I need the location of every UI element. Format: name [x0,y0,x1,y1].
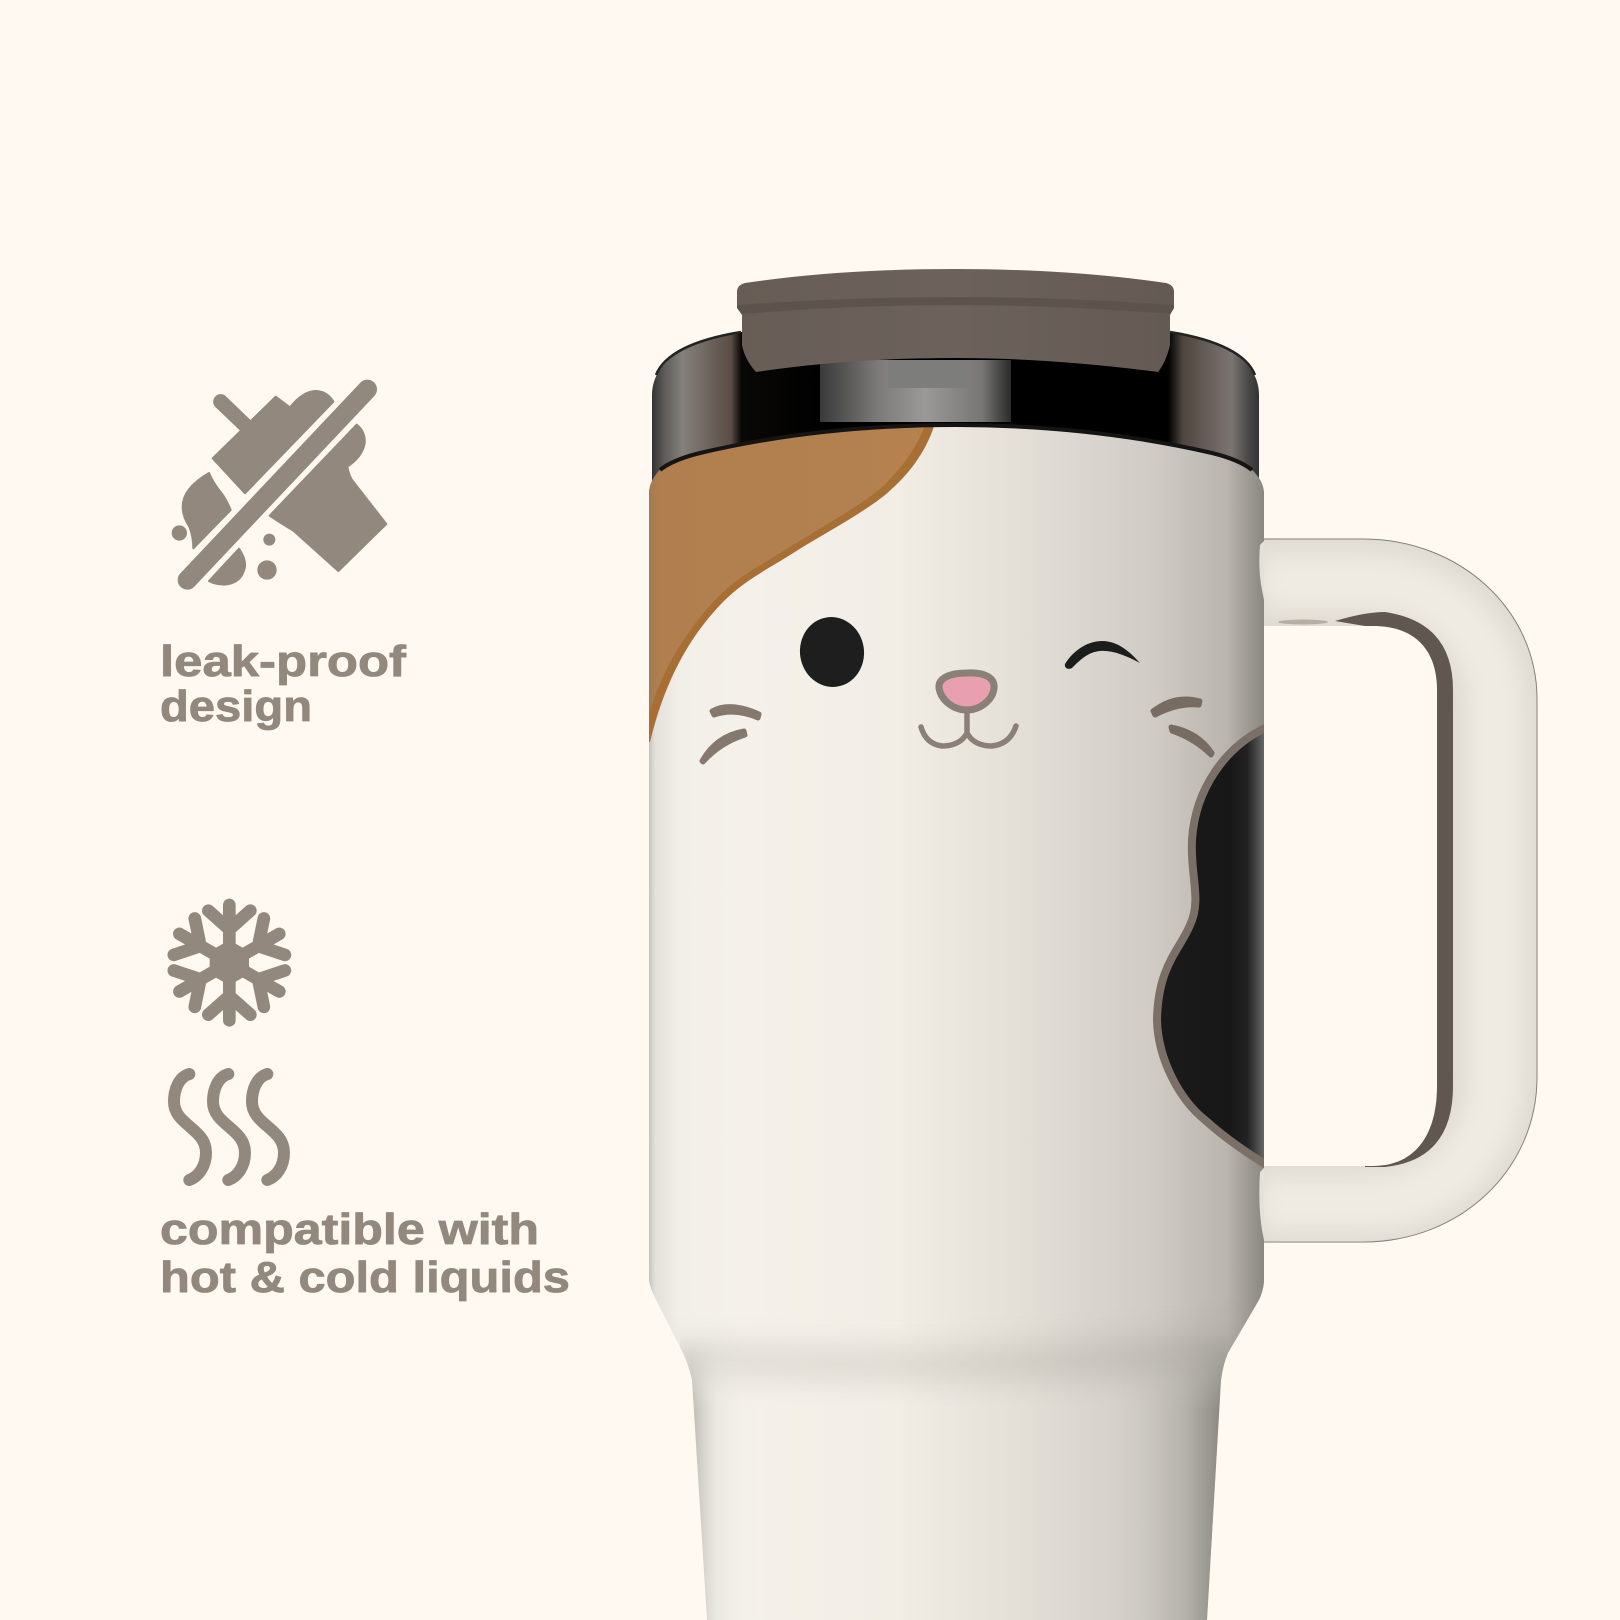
tumbler glass collar [652,332,1259,482]
body top rim [660,425,1252,470]
text: compatible with hot and cold liquids [160,1205,570,1302]
mouth [921,714,1016,746]
handle inner shadow band [1335,612,1453,1167]
right whiskers [1153,699,1212,755]
waist shading [680,1330,1240,1378]
nose [939,673,994,710]
tumbler handle [1260,539,1537,1242]
tumbler body [640,420,1280,1620]
glass shoulder edge [656,332,1255,375]
text: compatible with hot and cold liquids: hot & cold liquids [160,1253,570,1302]
winking eye [1065,641,1140,669]
icon: snowflake [169,905,290,1020]
lower section edge shading [680,1347,1229,1620]
icon: steam waves [174,1074,284,1180]
lid flange shadow [737,297,1174,314]
handle ends over body [1259,541,1264,1240]
handle opening [1262,626,1437,1166]
cat face [702,613,1212,762]
lid silhouette [737,269,1174,372]
text: compatible with hot and cold liquids: compatible with [160,1205,539,1254]
black patch [1157,726,1270,1167]
text: leak-proof design: leak-proof [160,637,406,686]
tumbler lid [737,269,1174,372]
handle underside mark [1278,620,1328,624]
left whiskers [702,707,759,762]
tan patch [640,420,936,742]
text: leak-proof design: design [160,682,312,731]
inner cylinder [820,360,1011,422]
text: leak-proof design [160,637,406,731]
icon: no leak brush [173,389,386,585]
left eye [795,613,869,691]
